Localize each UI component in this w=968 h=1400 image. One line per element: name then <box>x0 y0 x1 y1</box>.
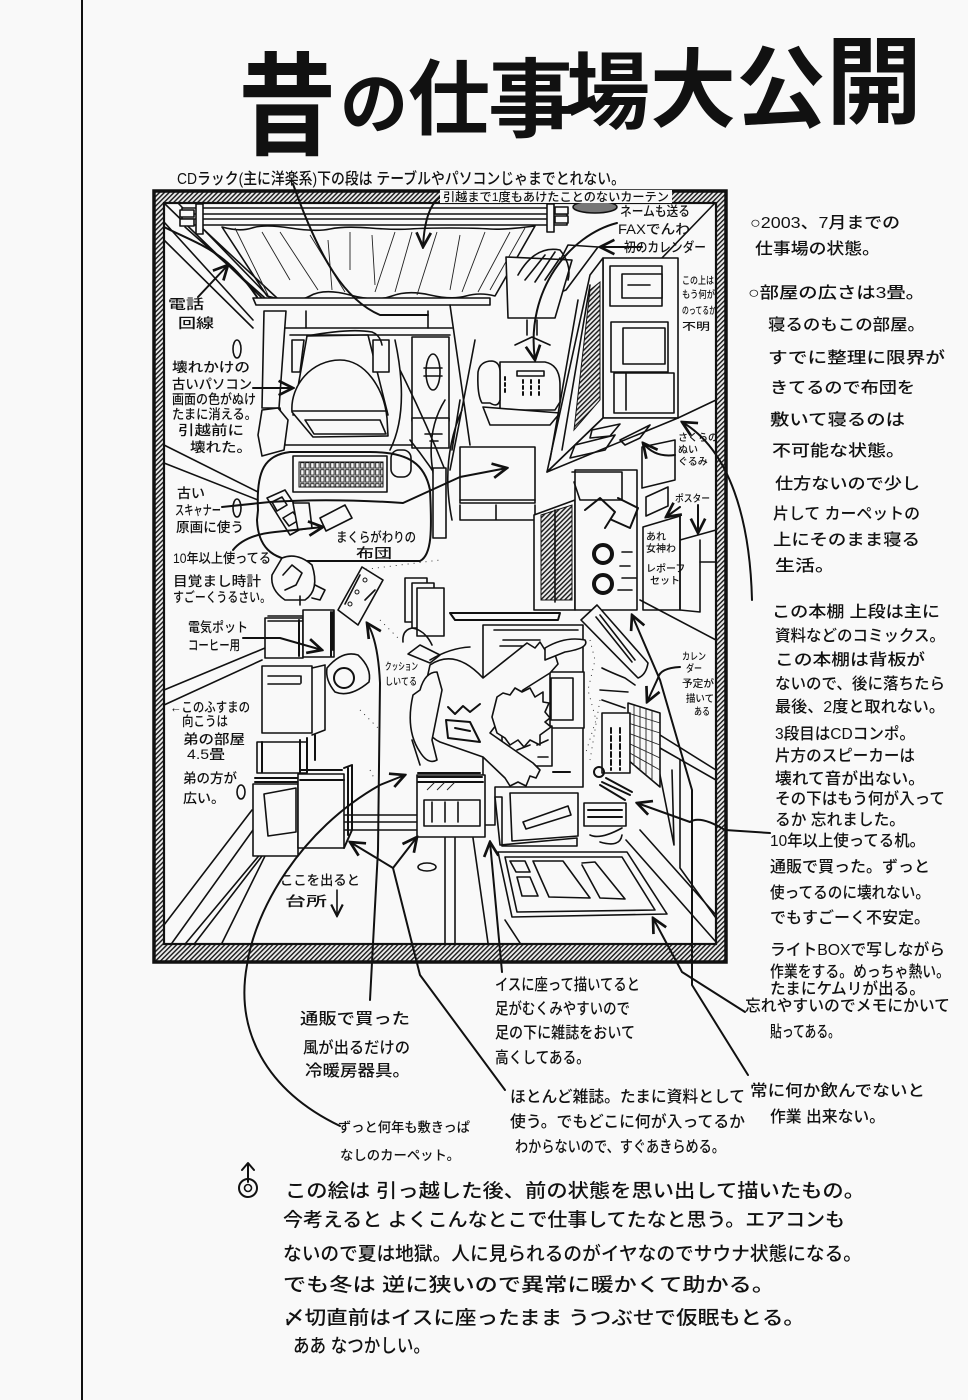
icon: ruler box <box>495 793 578 846</box>
icon: keyboard <box>293 456 387 492</box>
label: calendar: 初のカレンダー <box>624 239 706 255</box>
curtain <box>222 226 535 300</box>
curtain rod <box>180 204 568 234</box>
text block: bookshelf: 資料などのコミックス。 <box>775 627 945 645</box>
text block: bookshelf: 壊れて音が出ない。 <box>775 769 925 788</box>
text block: heater: 風が出るだけの <box>303 1038 410 1057</box>
magazines under desk <box>417 773 485 837</box>
text block: status note <box>750 215 900 258</box>
text block: room size: 生活。 <box>775 557 835 575</box>
text block: status note: ○2003、7月までの <box>750 215 900 232</box>
label: broken PC: 引越前に <box>178 422 244 438</box>
label: scanner: 古い <box>177 486 205 501</box>
icon: wall calendar <box>628 703 660 787</box>
label: broken PC: 古いパソコン <box>172 377 252 392</box>
label: fax <box>618 204 690 237</box>
icon: shelving unit <box>547 258 678 472</box>
label: goddess set: あれ <box>646 531 666 543</box>
icon: fax telephone <box>478 361 560 425</box>
power strip <box>433 468 446 538</box>
label: stuffed toy: さくらの <box>678 432 718 444</box>
text block: footrest: 足がむくみやすいので <box>495 999 630 1018</box>
label: cushion: しいてる <box>385 676 417 688</box>
text block: closing note: ないので夏は地獄。人に見られるのがイヤなのでサウナ状態になる。 <box>283 1243 862 1265</box>
icon: desk with papers <box>450 613 584 825</box>
text block: closing note: 〆切直前はイスに座ったまま うつぶせで仮眠もとる。 <box>283 1307 805 1329</box>
text block: heater <box>300 1010 410 1080</box>
label: electric pot: 電気ポット <box>188 620 248 635</box>
icon: bookcase and CD player <box>534 470 638 610</box>
text block: light box: ライトBOXで写しながら <box>770 940 945 959</box>
text block: room size: ○部屋の広さは3畳。 <box>748 284 925 302</box>
icon: scattered eraser crumbs <box>360 560 600 780</box>
cables <box>390 340 475 520</box>
label: calendar on wall: 予定が <box>682 677 714 690</box>
label: broken PC <box>172 359 257 455</box>
leader arrows <box>164 184 770 1126</box>
label: alarm clock: 目覚まし時計 <box>173 574 262 589</box>
label: top of shelf: もう何が <box>682 288 715 301</box>
text block: drinks <box>750 1082 925 1126</box>
text block: bookshelf <box>772 603 945 829</box>
title: 公 <box>736 40 826 140</box>
label: goddess set: セット <box>650 575 680 587</box>
label: futon: まくらがわりの <box>336 529 416 545</box>
label: electric pot <box>188 620 248 653</box>
text block: room size: きてるので布団を <box>770 379 915 397</box>
text block: desk <box>770 832 930 927</box>
futon outline <box>257 452 431 561</box>
text block: light box <box>770 940 950 998</box>
text block: room size: 上にそのまま寝る <box>773 531 920 549</box>
icon: male symbol spiral <box>239 1163 257 1197</box>
text block: bookshelf: 3段目はCDコンポ。 <box>775 725 915 743</box>
label: top of shelf <box>682 275 716 333</box>
label: phone line <box>168 297 215 331</box>
text block: room size: 仕方ないので少し <box>775 475 920 493</box>
label: alarm clock <box>173 550 271 605</box>
label: broken PC: たまに消える。 <box>172 407 257 422</box>
text block: drinks: 作業 出来ない。 <box>770 1108 885 1126</box>
text block: bookshelf: 最後、2度と取れない。 <box>775 698 945 716</box>
text block: calendar memo <box>745 997 950 1041</box>
text block: room size: 寝るのもこの部屋。 <box>768 316 925 334</box>
text block: room size: 敷いて寝るのは <box>770 410 905 429</box>
label: broken PC: 画面の色がぬけ <box>172 391 256 407</box>
label: brother's room: ←このふすまの <box>170 700 250 715</box>
label: brother's room: 広い。 <box>183 791 225 806</box>
text block: desk: 通販で買った。ずっと <box>770 858 930 876</box>
label: top of shelf: この上は <box>682 275 714 287</box>
icon: person drawing at desk from above <box>420 639 586 786</box>
title: 場 <box>566 46 650 140</box>
text block: footrest: 足の下に雑誌をおいて <box>495 1024 635 1042</box>
text block: carpet: なしのカーペット。 <box>340 1148 460 1163</box>
text block: desk: 10年以上使ってる机。 <box>770 832 925 850</box>
icon: printer box <box>460 447 535 520</box>
icon: desk lamp <box>581 605 648 708</box>
icon: paper bag <box>506 249 572 345</box>
label: stuffed toy: ぐるみ <box>678 456 708 468</box>
label: calendar on wall <box>682 651 714 718</box>
label: curtain never opened: 引越まで1度もあけたことのないカーテン <box>443 189 669 204</box>
label: alarm clock: すごーくうるさい。 <box>173 589 271 605</box>
caption: CD rack: CDラック(主に洋楽系)下の段は テーブルやパソコンじゃまでとれない。 <box>177 169 625 188</box>
label: kitchen <box>280 873 360 909</box>
icon: wall speaker <box>338 567 383 625</box>
wall posters <box>642 440 716 612</box>
text block: closing note: この絵は 引っ越した後、前の状態を思い出して描いたもの。 <box>285 1180 865 1202</box>
left stack of boxes <box>253 610 352 856</box>
label: top of shelf: のってるか <box>682 305 716 317</box>
label: calendar on wall: ある <box>694 706 710 718</box>
text block: calendar memo: 貼ってある。 <box>770 1023 840 1041</box>
text block: status note: 仕事場の状態。 <box>755 239 880 258</box>
text block: closing note: でも冬は 逆に狭いので異常に暖かくて助かる。 <box>283 1274 775 1296</box>
label: broken PC: 壊れた。 <box>190 439 252 455</box>
label: electric pot: コーヒー用 <box>188 638 240 653</box>
room frame <box>154 191 726 962</box>
text block: bookshelf: この本棚は背板が <box>775 650 925 669</box>
label: brother's room: 向こうは <box>182 714 228 729</box>
label: scanner: 原画に使う <box>176 520 244 535</box>
label: scanner: スキャナー <box>175 503 221 518</box>
icon: small wall sockets <box>233 201 617 799</box>
text block: footrest: 高くしてある。 <box>495 1049 590 1067</box>
text block: bookshelf: その下はもう何が入って <box>775 789 945 808</box>
label: phone line: 電話 <box>168 297 205 312</box>
label: fax: ネームも送る <box>620 204 690 219</box>
text block: light box: たまにケムリが出る。 <box>770 979 925 998</box>
text block: bookshelf: この本棚 上段は主に <box>772 603 940 621</box>
icon: fax calendar wall <box>540 245 598 300</box>
text block: magazines: ほとんど雑誌。たまに資料として <box>510 1088 745 1106</box>
label: cushion: クッション <box>385 661 418 673</box>
title: 大 <box>650 43 736 139</box>
text block: closing note: 今考えると よくこんなとこで仕事してたなと思う。エアコンも <box>283 1209 845 1231</box>
icon: phone line socket <box>233 340 241 358</box>
title: 事 <box>488 53 574 149</box>
text block: closing note: ああ なつかしい。 <box>293 1335 430 1357</box>
text block: bookshelf: 片方のスピーカーは <box>775 747 915 765</box>
text block: heater: 冷暖房器具。 <box>305 1062 410 1080</box>
label: futon: 布団 <box>356 545 392 561</box>
icon: old CRT monitor <box>292 331 389 437</box>
icon: office chair <box>403 628 470 765</box>
label: kitchen: 台所 <box>285 893 328 909</box>
label: scanner <box>175 486 244 535</box>
icon: alarm clock with crumpled paper <box>272 556 325 605</box>
left wall and floor lines <box>164 203 716 943</box>
icon: mouse <box>391 450 411 477</box>
title: 開 <box>826 30 922 137</box>
text block: desk: でもすごーく不安定。 <box>770 909 930 927</box>
title: 昔 <box>238 46 336 170</box>
label: cushion <box>385 661 418 688</box>
icon: floor cord <box>418 863 436 871</box>
label: goddess set <box>646 531 685 587</box>
label: brother's room <box>170 700 250 806</box>
text block: heater: 通販で買った <box>300 1010 410 1028</box>
label: poster: ポスター <box>675 493 710 505</box>
label: stuffed toy: ぬい <box>678 444 698 456</box>
label: brother's room: 弟の部屋 <box>183 731 245 747</box>
text block: room size: 不可能な状態。 <box>772 441 905 460</box>
title: の <box>340 67 408 143</box>
text block: magazines: わからないので、すぐあきらめる。 <box>515 1138 725 1156</box>
text block: footrest <box>495 976 640 1067</box>
page margin rule <box>81 0 83 1400</box>
label: calendar on wall: 描いて <box>686 692 714 705</box>
icon: electric pot <box>327 654 370 694</box>
text block: magazines <box>510 1088 745 1156</box>
text block: drinks: 常に何か飲んでないと <box>750 1082 925 1100</box>
icon: paper stack on floor <box>405 578 444 636</box>
text block: carpet: ずっと何年も敷きっぱ <box>338 1119 470 1135</box>
text block: bookshelf: るか 忘れました。 <box>775 811 905 829</box>
label: calendar on wall: カレン <box>682 651 706 663</box>
label: fax: FAXでんわ <box>618 222 690 237</box>
icon: light box <box>498 852 667 917</box>
label: goddess set: 女神わ <box>646 542 676 555</box>
icon: PC tower <box>412 337 449 448</box>
drawer and pens <box>584 713 632 844</box>
window sill <box>253 298 490 305</box>
label: brother's room: 4.5畳 <box>187 747 225 762</box>
label: brother's room: 弟の方が <box>183 770 237 786</box>
panel: room floor plan <box>154 191 726 962</box>
text block: footrest: イスに座って描いてると <box>495 976 640 994</box>
label: top of shelf: 不明 <box>682 321 710 333</box>
icon: old bag of stuff by wall <box>258 408 288 456</box>
label: stuffed toy <box>678 432 718 468</box>
icon: scanner and cassette devices <box>267 490 352 535</box>
label: phone line: 回線 <box>178 316 215 331</box>
label: broken PC: 壊れかけの <box>172 359 250 375</box>
label: calendar on wall: ダー <box>686 662 702 675</box>
text block: magazines: 使う。でもどこに何が入ってるか <box>510 1112 745 1131</box>
title <box>238 30 922 170</box>
label: kitchen: ここを出ると <box>280 873 360 888</box>
text block: calendar memo: 忘れやすいのでメモにかいて <box>745 997 950 1015</box>
text block: room size: すでに整理に限界が <box>768 348 945 367</box>
label: goddess set: レポーフ <box>646 563 685 575</box>
label: futon <box>336 529 416 561</box>
label: alarm clock: 10年以上使ってる <box>173 550 271 566</box>
text block: closing note <box>283 1180 865 1357</box>
text block: bookshelf: ないので、後に落ちたら <box>775 675 945 693</box>
text block: carpet <box>338 1119 470 1163</box>
title: 仕 <box>408 55 490 146</box>
text block: room size <box>748 284 945 575</box>
arrow: to kitchen <box>336 890 338 916</box>
text block: desk: 使ってるのに壊れない。 <box>770 884 930 902</box>
computer desk <box>262 305 470 445</box>
text block: room size: 片して カーペットの <box>773 505 920 523</box>
